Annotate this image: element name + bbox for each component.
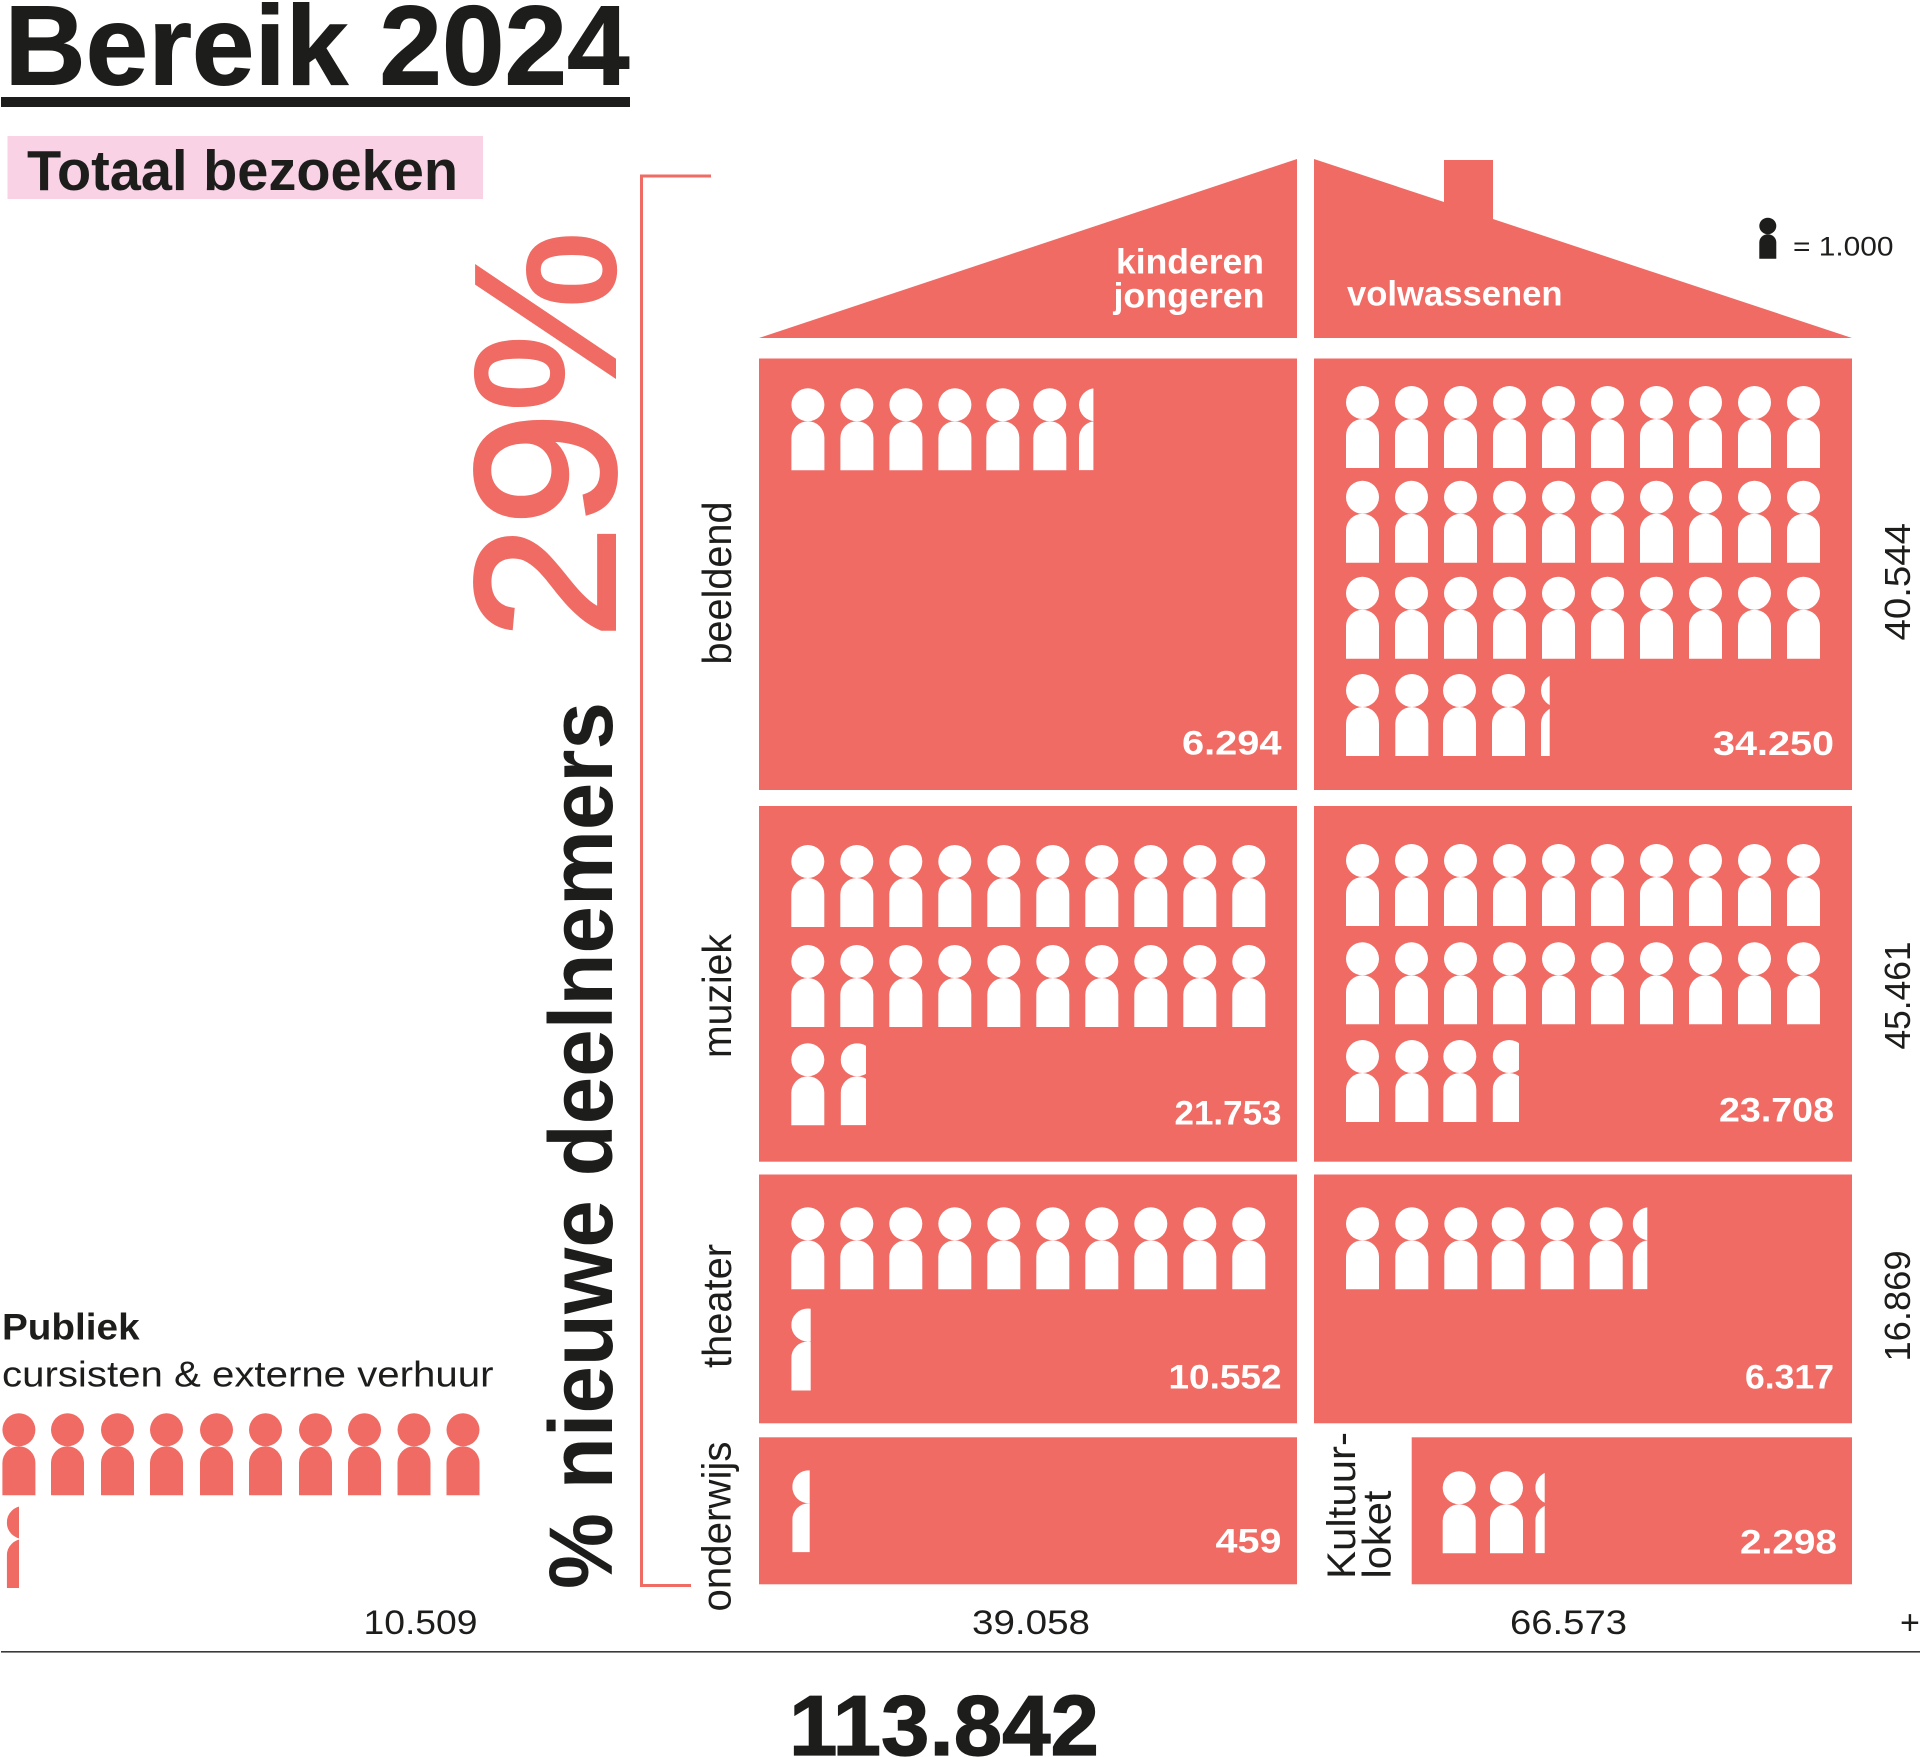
legend: one figure = 1.000 bbox=[1759, 218, 1894, 262]
category label: muziek: muziek bbox=[694, 934, 740, 1058]
panel: Kultuurloket bbox=[1412, 1437, 1852, 1584]
row total: 40.544: 40.544 bbox=[1877, 523, 1918, 640]
block: publiek bbox=[2, 1306, 494, 1588]
roof: kinderen jongeren: kinderen bbox=[1116, 242, 1264, 281]
value: 21.753: 21.753 bbox=[1174, 1094, 1282, 1132]
figure: onderwijs bbox=[792, 1470, 810, 1552]
category label: Kultuurloket: Kultuur- bbox=[1320, 1432, 1364, 1579]
panel: onderwijs bbox=[759, 1437, 1297, 1584]
category label: Kultuurloket: loket bbox=[1356, 1490, 1400, 1578]
figures: theater kinderen bbox=[791, 1207, 1265, 1390]
label: % nieuwe deelnemers: % nieuwe deelnemers bbox=[532, 702, 632, 1589]
panel: theater volwassenen bbox=[1314, 1174, 1852, 1423]
column total: 10.509: 10.509 bbox=[364, 1604, 478, 1642]
category label: theater: theater bbox=[694, 1244, 740, 1368]
roof: volwassenen with chimney: volwassenen bbox=[1347, 274, 1562, 313]
panel: beeldend kinderen bbox=[759, 358, 1297, 790]
heading: publiek: Publiek bbox=[2, 1306, 140, 1347]
value: 6.317: 6.317 bbox=[1745, 1358, 1834, 1396]
figures: beeldend volwassenen bbox=[1346, 386, 1820, 756]
roof: kinderen jongeren: jongeren bbox=[1112, 277, 1264, 316]
figures: theater volwassenen bbox=[1346, 1207, 1666, 1289]
row total: 45.461: 45.461 bbox=[1877, 942, 1918, 1050]
value: 2.298: 2.298 bbox=[1740, 1524, 1837, 1562]
plus sign: + bbox=[1900, 1604, 1920, 1642]
heading: totaal bezoeken: Totaal bezoeken bbox=[27, 139, 458, 203]
subheading: cursisten & externe verhuur: cursisten & externe verhuur bbox=[2, 1354, 494, 1395]
figures: muziek volwassenen bbox=[1346, 844, 1820, 1122]
value: 6.294: 6.294 bbox=[1182, 724, 1282, 762]
row total: 16.869: 16.869 bbox=[1877, 1250, 1918, 1362]
panel: theater kinderen bbox=[759, 1174, 1297, 1423]
roof: volwassenen with chimney bbox=[1314, 159, 1852, 338]
value: 23.708: 23.708 bbox=[1719, 1092, 1834, 1130]
panel: muziek volwassenen bbox=[1314, 806, 1852, 1162]
legend: one figure = 1.000: = 1.000 bbox=[1793, 232, 1894, 262]
figures: publiek bbox=[2, 1413, 480, 1588]
column total: 39.058: 39.058 bbox=[972, 1604, 1090, 1642]
roof: kinderen jongeren bbox=[759, 159, 1297, 338]
value: 34.250: 34.250 bbox=[1713, 725, 1834, 763]
value: 459: 459 bbox=[1216, 1522, 1282, 1560]
panel: beeldend volwassenen bbox=[1314, 358, 1852, 790]
column total: 66.573: 66.573 bbox=[1510, 1604, 1627, 1642]
category label: onderwijs: onderwijs bbox=[694, 1442, 740, 1612]
bracket bbox=[642, 176, 711, 1586]
category label: beeldend: beeldend bbox=[694, 502, 740, 664]
figures: Kultuurloket bbox=[1443, 1471, 1568, 1553]
figures: beeldend kinderen bbox=[791, 388, 1112, 470]
panel: muziek kinderen bbox=[759, 806, 1297, 1162]
value: 10.552: 10.552 bbox=[1168, 1358, 1282, 1396]
figures: muziek kinderen bbox=[791, 845, 1265, 1125]
big percentage 29%: 29% bbox=[435, 231, 657, 639]
category label: Kultuurloket bbox=[1320, 1432, 1400, 1579]
